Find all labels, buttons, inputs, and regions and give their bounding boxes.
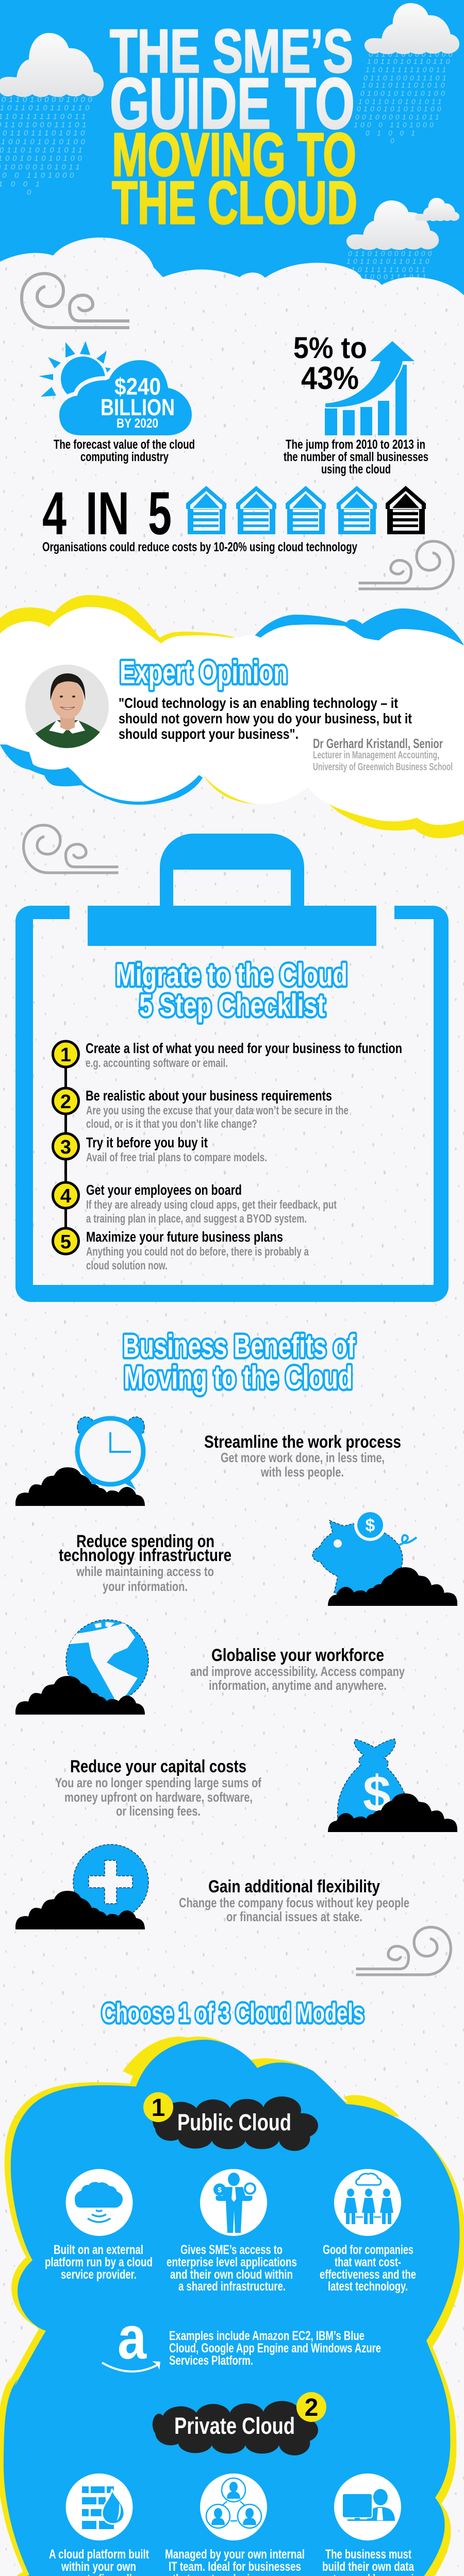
icon: amazon logo bbox=[102, 2304, 160, 2372]
examples text bbox=[169, 2329, 381, 2368]
stat: $240 billion: BILLION bbox=[101, 394, 175, 420]
heading: business benefits: Business Benefits of bbox=[123, 1329, 355, 1364]
panel: clipboard checklist bbox=[15, 834, 449, 1302]
benefit: capital costs bbox=[55, 1739, 457, 1832]
stat: $240 billion bbox=[39, 341, 195, 464]
caption bbox=[54, 437, 195, 464]
cloud icon lower right bbox=[346, 200, 439, 250]
caption col 2: and their own cloud within bbox=[170, 2267, 293, 2282]
icon: team under cloud bbox=[334, 2169, 401, 2236]
binary rain right: 0110100001000 bbox=[369, 50, 455, 58]
icon: wind swirl bbox=[356, 1927, 451, 1975]
binary rain right: 1011010110110 bbox=[367, 57, 453, 65]
step 1: e.g. accounting software or email. bbox=[86, 1056, 228, 1070]
step 4 bbox=[53, 1182, 337, 1225]
caption col 1: A cloud platform built bbox=[49, 2547, 150, 2562]
examples text: Examples include Amazon EC2, IBM’s Blue bbox=[169, 2329, 364, 2343]
binary rain right: 0110100011101 bbox=[363, 74, 449, 82]
caption: computing industry bbox=[80, 450, 169, 464]
binary rain lower: 0101000111011 bbox=[343, 273, 429, 281]
caption col 3: build their own data bbox=[322, 2560, 415, 2574]
caption bbox=[284, 437, 428, 477]
step 2: cloud, or is it that you don’t like change? bbox=[86, 1117, 257, 1130]
stat: $240 billion: $240 bbox=[114, 373, 161, 400]
icon: firewall bbox=[66, 2473, 133, 2540]
step 4: If they are already using cloud apps, get their feedback, put bbox=[86, 1198, 337, 1211]
binary rain lower: 0110100001000 bbox=[348, 249, 435, 258]
cloud icon small bbox=[415, 198, 459, 221]
binary rain right: 0100101010100 bbox=[360, 89, 448, 97]
icon: managed team bbox=[200, 2473, 267, 2540]
binary rain left: 0 bbox=[27, 188, 34, 197]
benefit: reduce spending bbox=[59, 1509, 457, 1606]
step connector bbox=[64, 1054, 67, 1241]
stat: 4 in 5: 4 bbox=[42, 480, 67, 548]
binary rain lower bbox=[346, 251, 432, 279]
benefit: streamline: Streamline the work process bbox=[204, 1432, 401, 1452]
header sky panel bbox=[0, 0, 464, 295]
cloud icon top right bbox=[364, 3, 459, 54]
benefit: flexibility: Gain additional flexibility bbox=[208, 1877, 380, 1896]
icon: plus circle bbox=[15, 1844, 148, 1929]
step 3: Try it before you buy it bbox=[86, 1134, 208, 1150]
benefit: capital costs: You are no longer spending large sums of bbox=[55, 1775, 261, 1790]
badge: private cloud: 2 bbox=[305, 2394, 318, 2421]
binary rain right: 1011011101010 bbox=[362, 81, 448, 89]
caption col 3: that want cost- bbox=[335, 2255, 401, 2269]
title: GUIDE TO bbox=[110, 63, 355, 144]
caption col 3: latest technology. bbox=[328, 2279, 408, 2294]
badge: private cloud bbox=[153, 2392, 326, 2455]
badge: private cloud: Private Cloud bbox=[174, 2413, 295, 2439]
caption col 1: Built on an external bbox=[54, 2243, 143, 2257]
caption col 2: enterprise level applications bbox=[167, 2255, 297, 2269]
binary rain right: 100 0 1101000 bbox=[354, 121, 436, 129]
badge: public cloud bbox=[143, 2092, 318, 2151]
heading: migrate bbox=[115, 958, 347, 1023]
step 5 bbox=[53, 1228, 309, 1272]
cloud backing bbox=[0, 2037, 464, 2576]
caption col 3 bbox=[320, 2243, 416, 2294]
icon: sun and cloud bbox=[39, 341, 192, 435]
quote: should support your business". bbox=[119, 726, 299, 742]
benefit: reduce spending: Reduce spending on bbox=[76, 1532, 214, 1551]
caption col 1: platform run by a cloud bbox=[45, 2255, 153, 2269]
title: THE SME’S bbox=[110, 17, 353, 86]
benefit: streamline: Get more work done, in less time, bbox=[221, 1450, 385, 1465]
stat: 4 in 5: 5 bbox=[148, 480, 172, 548]
step 3 bbox=[53, 1133, 267, 1164]
binary rain left: 1011010110110 bbox=[0, 104, 92, 112]
quote: "Cloud technology is an enabling technology – it bbox=[119, 695, 398, 711]
benefit: streamline bbox=[15, 1417, 401, 1506]
benefit: globalise bbox=[15, 1620, 405, 1715]
binary rain right: 0100101010100 bbox=[357, 105, 444, 113]
binary rain lower: 1101111110011 bbox=[345, 265, 428, 274]
caption col 1: within your own bbox=[61, 2560, 136, 2574]
icon: wind swirl bbox=[22, 274, 129, 328]
caption col 2: Managed by your own internal bbox=[165, 2547, 305, 2562]
step 2: 2 bbox=[60, 1091, 71, 1113]
stat: $240 billion: BY 2020 bbox=[117, 416, 158, 431]
stat: 4 in 5: IN bbox=[86, 480, 129, 548]
benefit: capital costs: or licensing fees. bbox=[116, 1803, 201, 1819]
caption col 1 bbox=[45, 2243, 153, 2282]
heading: migrate: 5 Step Checklist bbox=[139, 988, 325, 1023]
caption col 2: Gives SME’s access to bbox=[180, 2243, 283, 2257]
benefit: capital costs: money upfront on hardware, software, bbox=[64, 1789, 253, 1805]
caption col 3 bbox=[316, 2547, 420, 2576]
stat: 5% to 43%: 5% to bbox=[293, 331, 367, 365]
badge: public cloud: Public Cloud bbox=[177, 2109, 291, 2136]
step 3: Avail of free trial plans to compare models. bbox=[86, 1150, 267, 1164]
binary rain right bbox=[354, 50, 455, 145]
photo: Dr Gerhard Kristandl bbox=[25, 665, 109, 752]
examples text: Services Platform. bbox=[169, 2353, 253, 2368]
step 2 bbox=[53, 1088, 349, 1130]
heading: business benefits bbox=[123, 1329, 355, 1396]
benefit: reduce spending: while maintaining access to bbox=[76, 1564, 214, 1579]
benefit: reduce spending: your information. bbox=[103, 1579, 188, 1594]
caption col 2: IT team. Ideal for businesses bbox=[169, 2560, 301, 2574]
benefit: capital costs: Reduce your capital costs bbox=[70, 1757, 246, 1776]
quote: should not govern how you do your business, but it bbox=[119, 710, 412, 726]
benefit: globalise: Globalise your workforce bbox=[211, 1646, 384, 1665]
caption col 1: service provider. bbox=[61, 2267, 137, 2282]
step 5: cloud solution now. bbox=[86, 1259, 168, 1272]
step 5: Maximize your future business plans bbox=[86, 1229, 283, 1245]
quote bbox=[119, 695, 412, 742]
attribution bbox=[313, 736, 453, 773]
stat: 4 in 5 bbox=[42, 480, 426, 554]
examples text: Cloud, Google App Engine and Windows Azure bbox=[169, 2341, 381, 2355]
step 5: Anything you could not do before, there is probably a bbox=[86, 1245, 309, 1258]
cloud icon left bbox=[0, 33, 104, 97]
caption: using the cloud bbox=[321, 462, 391, 477]
caption col 3: The business must bbox=[325, 2547, 411, 2562]
binary rain lower: 1011010110110 bbox=[346, 257, 432, 265]
binary rain left: 1101111110011 bbox=[0, 112, 89, 121]
heading: business benefits: Moving to the Cloud bbox=[124, 1360, 353, 1396]
benefit: flexibility bbox=[15, 1844, 409, 1929]
title: MOVING TO bbox=[112, 121, 356, 189]
panel: cloud models blue cloud bbox=[0, 2037, 464, 2576]
step 4: a training plan in place, and suggest a BYOD system. bbox=[86, 1212, 307, 1225]
binary rain right: 1011010101011 bbox=[358, 97, 444, 106]
benefit: globalise: information, anytime and anywhere. bbox=[209, 1677, 387, 1693]
icon: money bag bbox=[328, 1739, 457, 1832]
caption col 3: effectiveness and the bbox=[320, 2267, 416, 2282]
icon: businessman balancing bbox=[200, 2169, 267, 2236]
chart: rising bars with arrow bbox=[325, 341, 415, 435]
icon: businessman balancing: $ bbox=[218, 2185, 222, 2194]
caption: The forecast value of the cloud bbox=[54, 437, 195, 452]
icon: wind swirl bbox=[24, 825, 119, 873]
step 5: 5 bbox=[60, 1231, 71, 1253]
icon: wind swirl bbox=[358, 541, 453, 589]
step 2: Be realistic about your business requirements bbox=[86, 1088, 332, 1104]
binary rain left: 0110100001000 bbox=[2, 95, 95, 104]
icon: money bag: $ bbox=[363, 1765, 391, 1822]
caption col 2 bbox=[167, 2243, 297, 2294]
caption col 2: a shared infrastructure. bbox=[178, 2279, 286, 2294]
step 1 bbox=[53, 1040, 402, 1070]
icons: five houses bbox=[186, 486, 426, 534]
heading: cloud models: Choose 1 of 3 Cloud Models bbox=[102, 1998, 364, 2028]
benefit: reduce spending: technology infrastructure bbox=[59, 1546, 231, 1565]
binary rain left bbox=[0, 95, 95, 197]
badge: public cloud: 1 bbox=[152, 2094, 165, 2122]
step 3: 3 bbox=[60, 1137, 71, 1158]
benefit: flexibility: or financial issues at stake. bbox=[226, 1909, 362, 1924]
icon: globe bbox=[15, 1620, 148, 1715]
benefit: globalise: and improve accessibility. Access company bbox=[190, 1664, 405, 1679]
binary rain right: 1101111110011 bbox=[366, 65, 449, 74]
caption col 2 bbox=[165, 2547, 305, 2576]
step 4: Get your employees on board bbox=[86, 1182, 242, 1198]
binary rain right: 0010000101011 bbox=[355, 113, 442, 121]
caption col 3: Good for companies bbox=[323, 2243, 413, 2257]
stat: 5% to 43%: 43% bbox=[301, 361, 359, 396]
icon: computer user bbox=[334, 2473, 401, 2540]
step 4: 4 bbox=[60, 1185, 71, 1207]
benefit: streamline: with less people. bbox=[260, 1464, 344, 1480]
icon: amazon logo: a bbox=[118, 2304, 147, 2372]
icon: piggy bank bbox=[312, 1509, 457, 1606]
icon: piggy bank: $ bbox=[366, 1516, 375, 1535]
heading: expert opinion: Expert Opinion bbox=[120, 655, 288, 690]
title: THE CLOUD bbox=[112, 169, 357, 237]
step 2: Are you using the excuse that your data won’t be secure in the bbox=[86, 1104, 349, 1117]
binary rain right: 0 1 0 0 1 bbox=[366, 129, 418, 137]
step 1: 1 bbox=[60, 1044, 71, 1066]
panel: expert opinion cloud bbox=[0, 595, 464, 838]
stat: 4 in 5: Organisations could reduce costs by 10-20% using cloud technology bbox=[42, 540, 357, 554]
binary rain right: 0 bbox=[390, 137, 397, 145]
clipboard frame bbox=[15, 834, 449, 1302]
caption col 1 bbox=[49, 2547, 150, 2576]
icon: cloud with wifi bbox=[66, 2169, 133, 2236]
heading: migrate: Migrate to the Cloud bbox=[115, 958, 347, 992]
stat: 5% to 43% bbox=[284, 331, 428, 477]
title bbox=[110, 17, 357, 237]
icon: alarm clock bbox=[15, 1417, 145, 1506]
